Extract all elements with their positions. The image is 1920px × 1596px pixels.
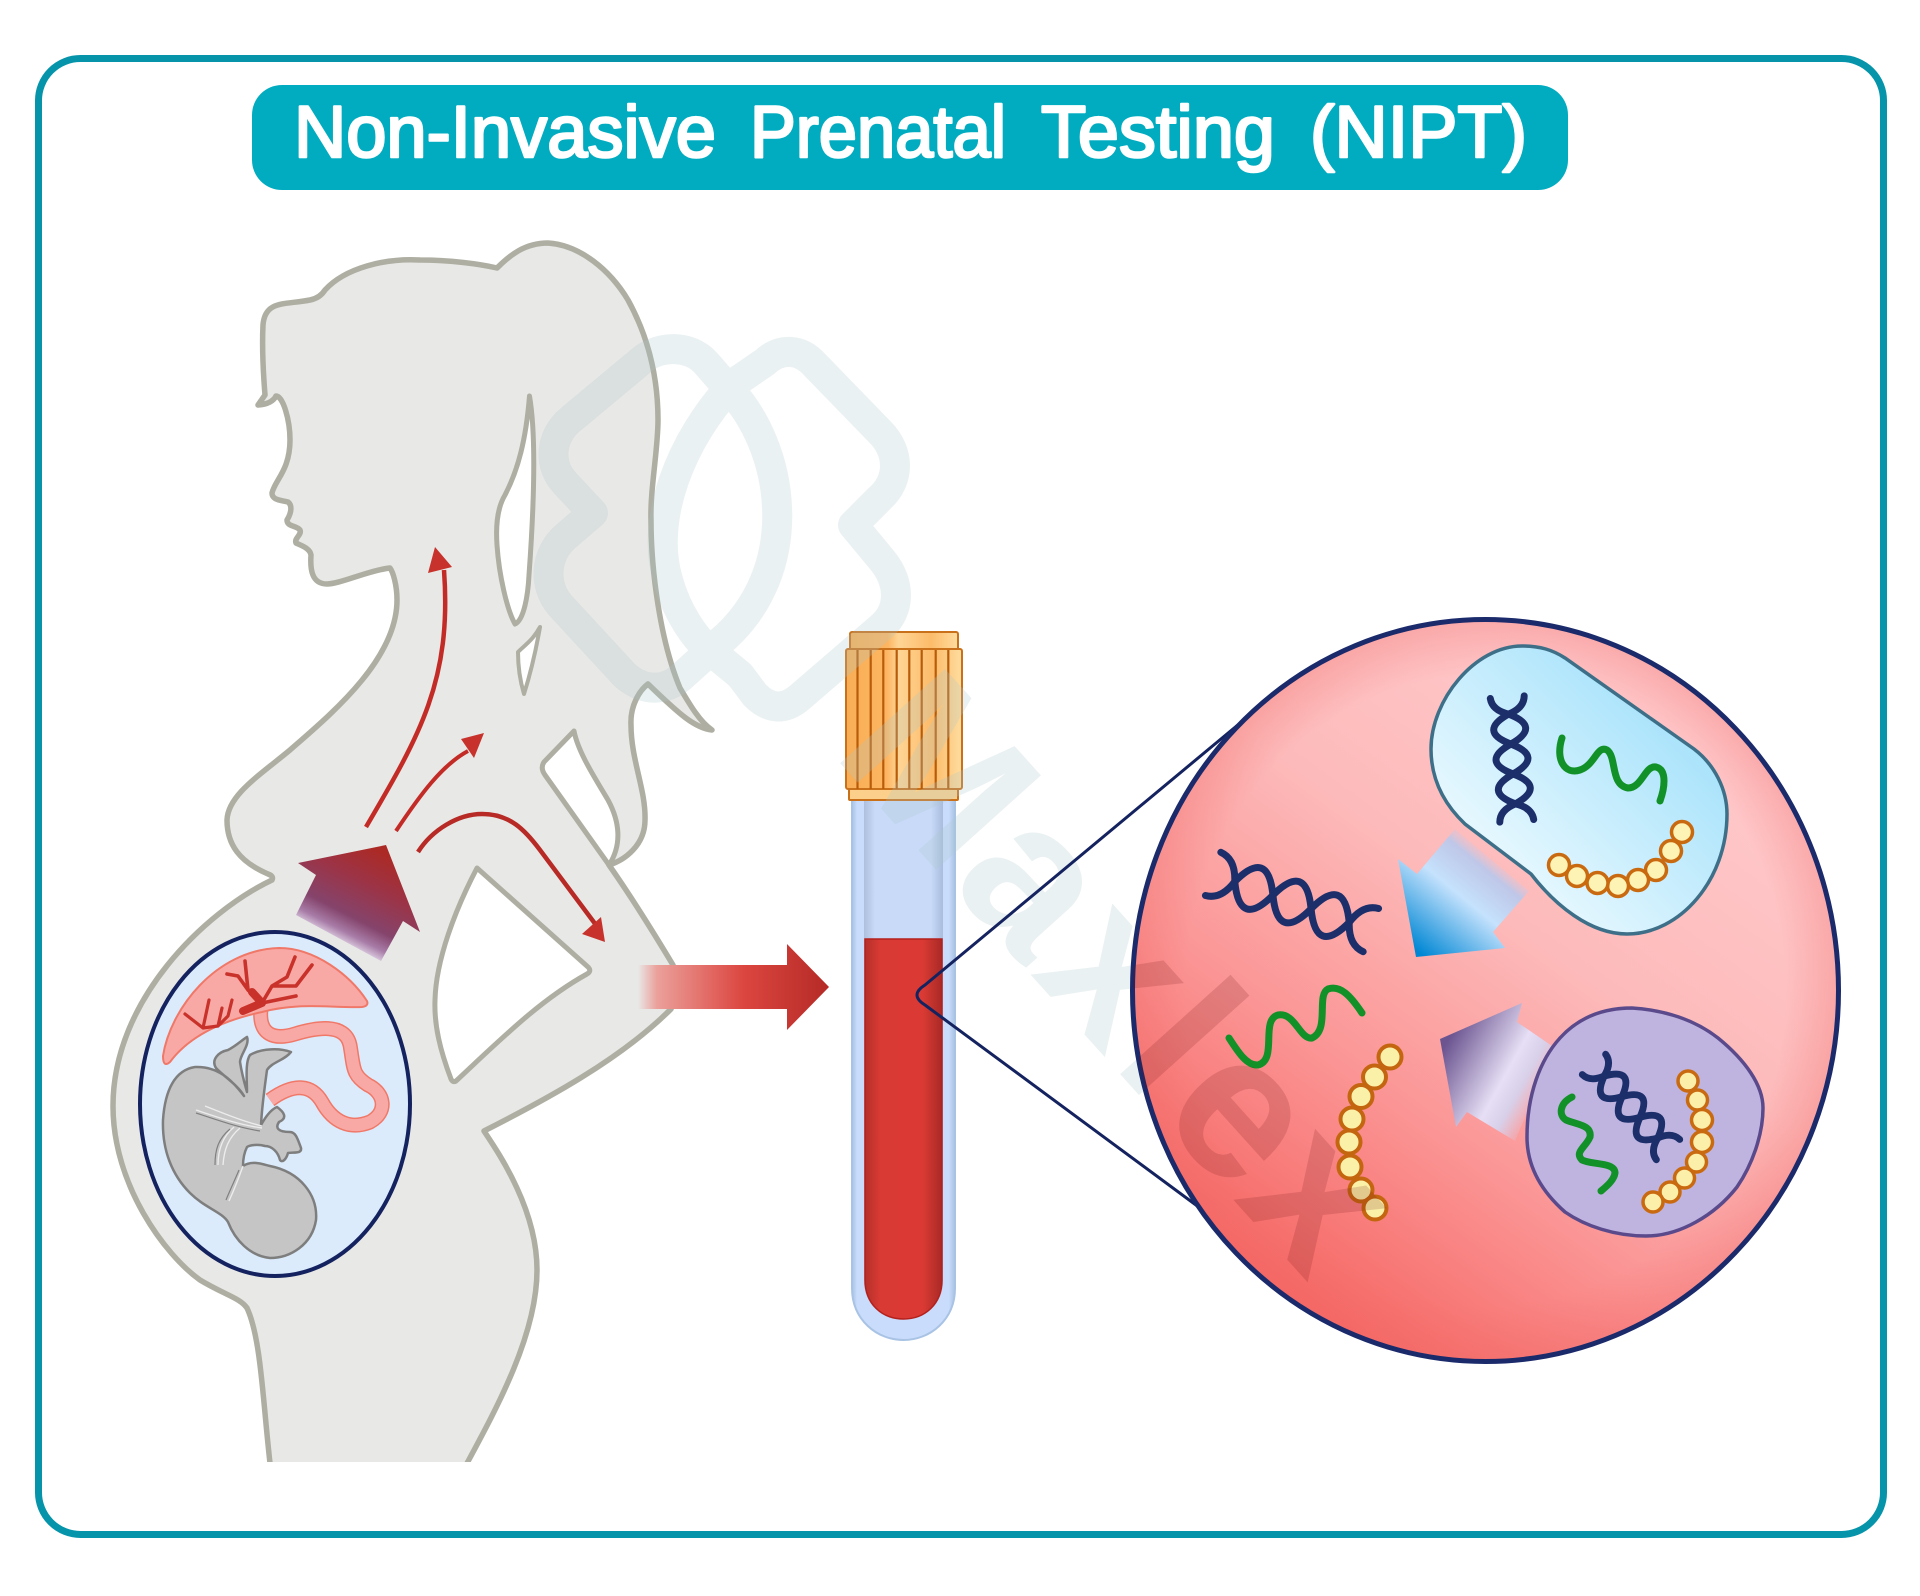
fetal cell (blue) <box>1431 646 1727 934</box>
title banner <box>252 85 1568 190</box>
tube inner <box>864 800 943 1320</box>
arrow: placenta to maternal blood <box>296 845 420 961</box>
arrow: purple cell release <box>1440 1003 1555 1141</box>
blood <box>865 939 942 1319</box>
title banner: (NIPT) <box>1310 92 1527 173</box>
watermark: logo mark <box>549 349 896 707</box>
body outline <box>113 243 712 1480</box>
protein beads in blue cell <box>1548 822 1692 896</box>
cell-free DNA <box>1205 852 1379 952</box>
womb with fetus <box>140 932 410 1276</box>
watermark: brand text: Maxlex <box>798 629 1446 1313</box>
RNA in purple cell <box>1561 1097 1615 1191</box>
DNA in blue cell <box>1490 696 1534 822</box>
title banner: Non-Invasive <box>294 92 716 173</box>
fetus <box>163 1037 316 1258</box>
panel: pregnant woman silhouette <box>113 243 712 1480</box>
title banner: Testing <box>1041 92 1275 173</box>
blood collection tube <box>846 632 962 1340</box>
zoom lines from tube to circle <box>917 719 1245 1208</box>
protein beads in purple cell <box>1643 1071 1712 1212</box>
placental vessels <box>185 957 312 1028</box>
arrow: fetal DNA rising to head <box>366 547 452 827</box>
arrow: blood draw to tube <box>638 944 829 1030</box>
DNA in purple cell <box>1582 1054 1680 1160</box>
arrow: circulation to arm <box>418 814 605 942</box>
maternal cell (purple) <box>1527 1008 1763 1236</box>
shoulder gap <box>542 731 618 865</box>
hair gap <box>497 396 534 624</box>
RNA in blue cell <box>1560 738 1664 801</box>
small neck gap <box>518 627 540 694</box>
panel: magnified blood circle <box>1132 620 1838 1362</box>
placenta <box>163 948 367 1064</box>
arrow: blue cell release <box>1398 829 1529 957</box>
title banner: Prenatal <box>750 92 1006 173</box>
arrow: circulation to chest <box>396 733 484 831</box>
tube glass <box>852 800 955 1340</box>
free protein beads <box>1338 1046 1402 1220</box>
cell-free RNA <box>1229 988 1362 1065</box>
arm triangle gap <box>435 868 590 1082</box>
umbilical cord <box>261 1008 382 1125</box>
watermark: brand text over circle: Maxlex <box>798 629 1446 1313</box>
cap <box>846 632 962 800</box>
